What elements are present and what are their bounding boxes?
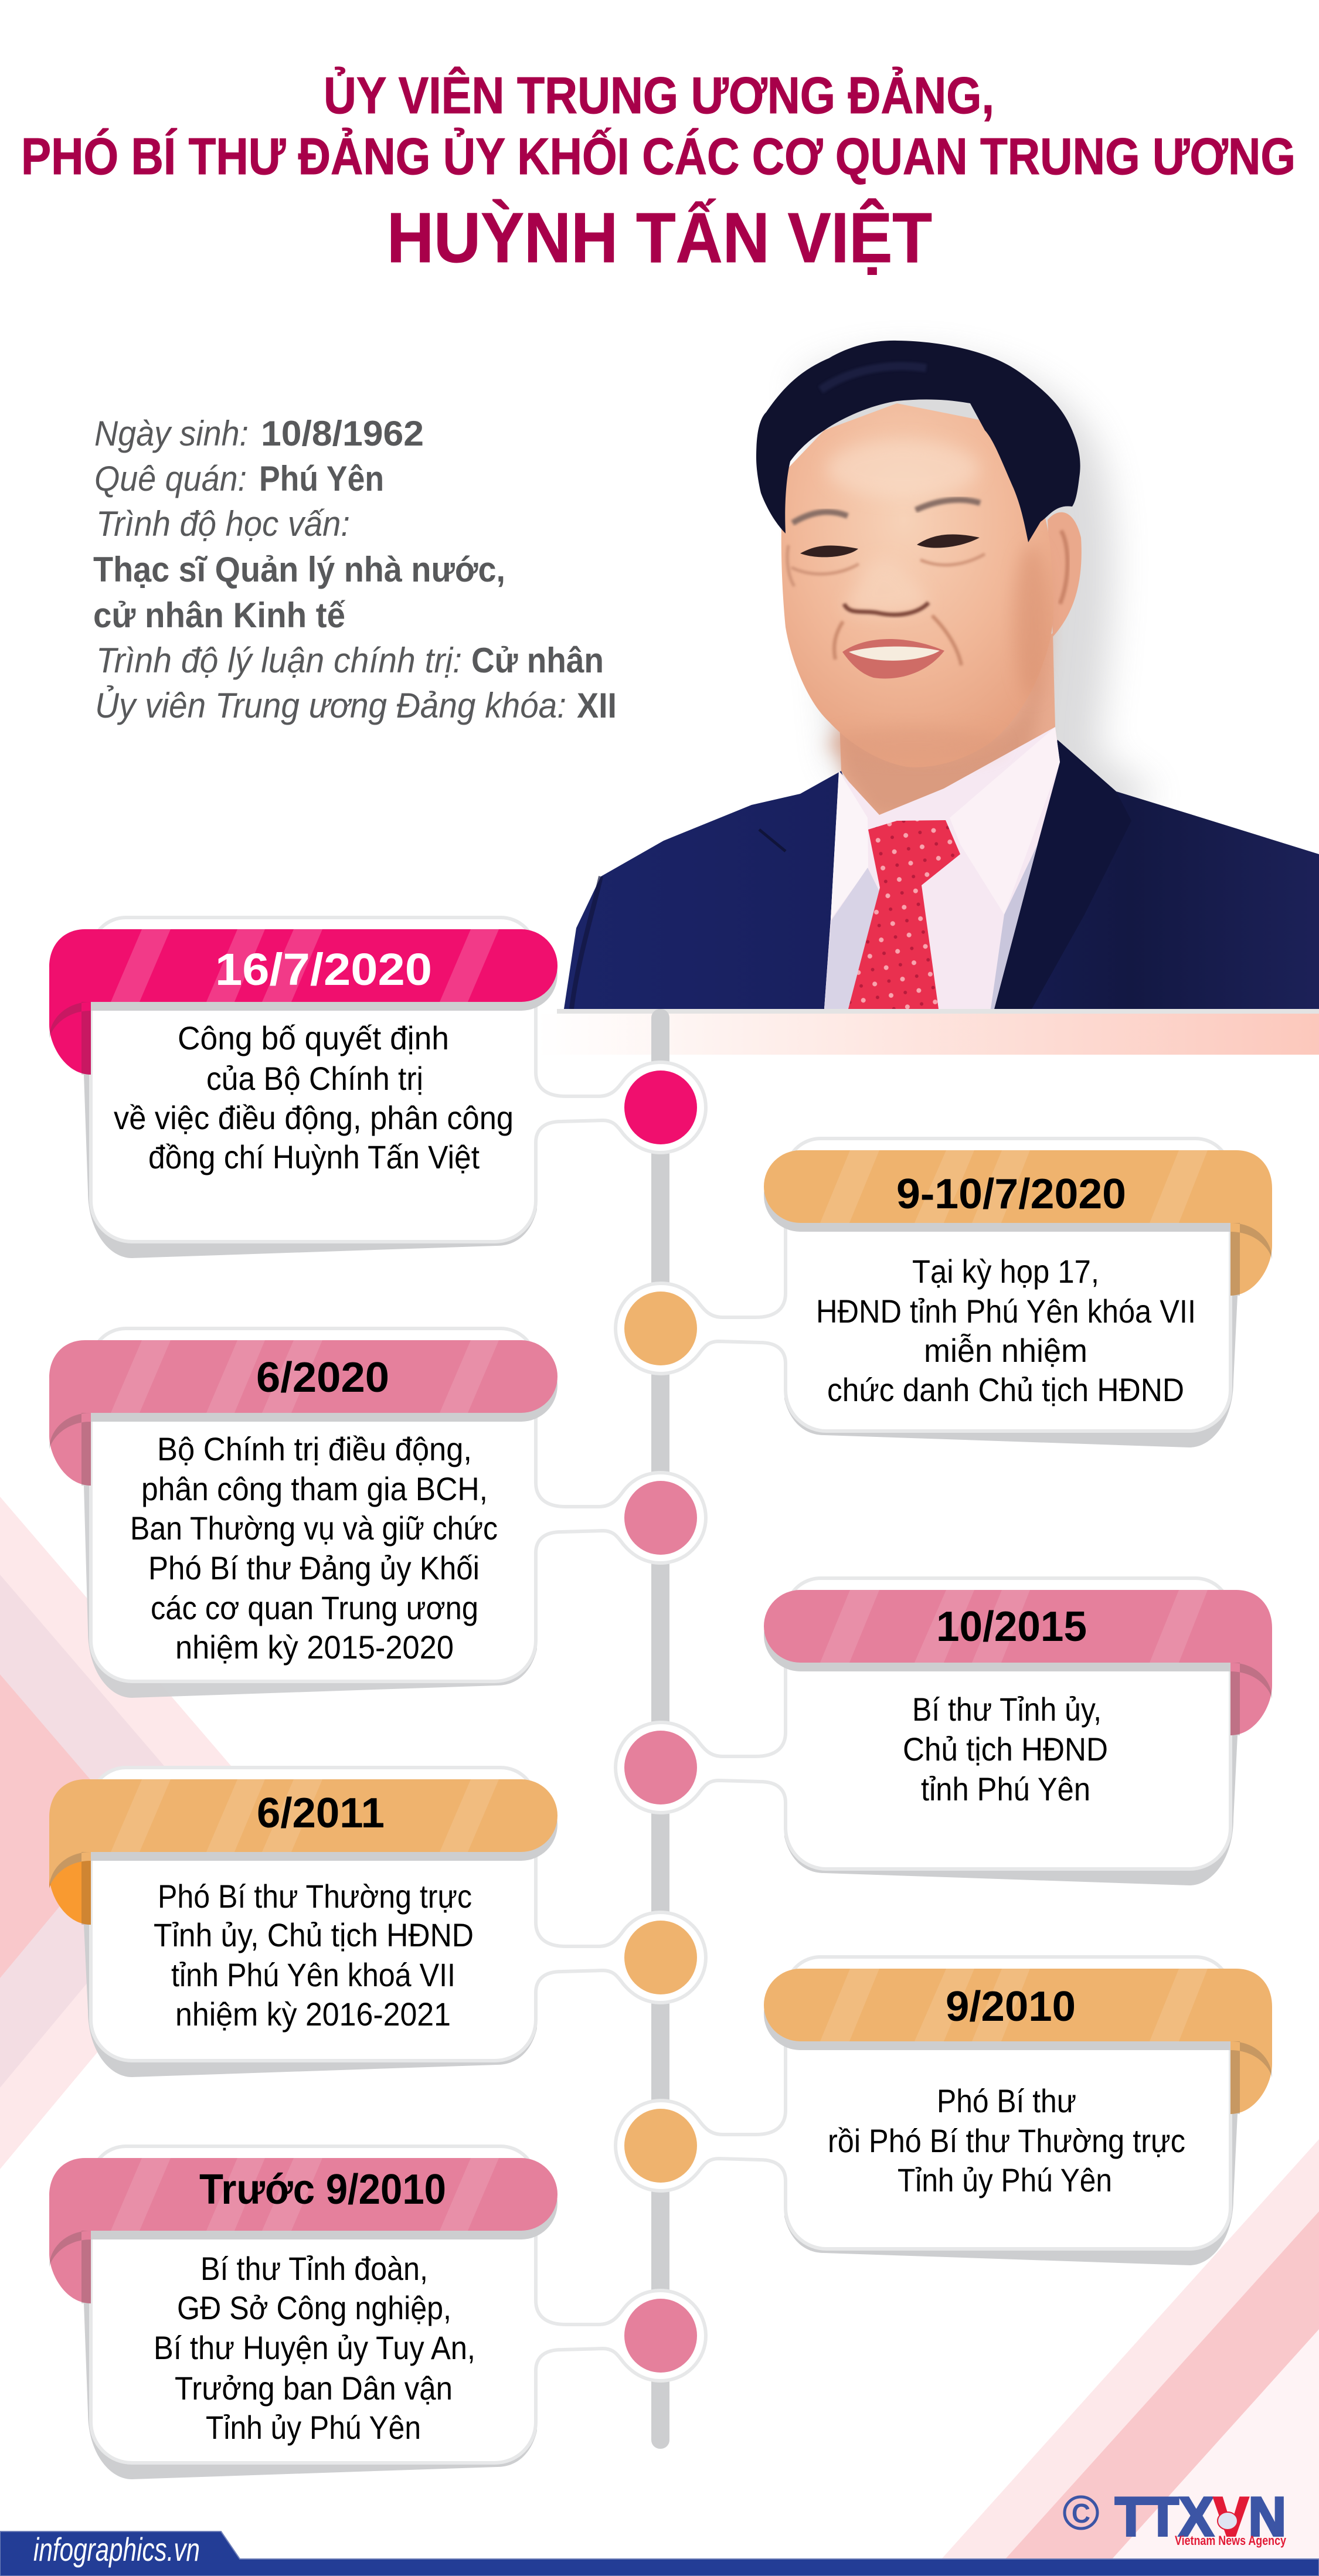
gradient band under portrait — [538, 1009, 1319, 1055]
card body with neck and node ring — [616, 1578, 1230, 1869]
timeline node — [624, 2109, 697, 2183]
personal info text block: 10/8/1962 — [261, 414, 424, 453]
ribbon — [49, 1340, 557, 1486]
card shadow — [84, 1925, 537, 2077]
card: 9-10/7/2020 — [616, 1139, 1272, 1447]
card body with neck and node ring — [616, 1139, 1230, 1431]
card: Trước 9/2010 — [49, 2146, 706, 2479]
ribbon date: 6/2011 — [257, 1790, 385, 1837]
card text: Công bố quyết định — [178, 1019, 449, 1056]
card body with neck and node ring — [91, 917, 706, 1242]
ribbon date: 6/2020 — [256, 1354, 389, 1401]
card body with neck and node ring — [91, 2146, 706, 2463]
card: 16/7/2020 — [49, 917, 706, 1258]
card text: miễn nhiệm — [924, 1332, 1087, 1369]
ribbon date: 9/2010 — [946, 1983, 1076, 2030]
card shadow — [784, 1735, 1238, 1885]
card text — [828, 2082, 1185, 2198]
card text — [903, 1691, 1108, 1807]
title — [21, 66, 1296, 277]
card text: tỉnh Phú Yên khoá VII — [171, 1956, 455, 1993]
background: bottom right pink stripes — [941, 2139, 1319, 2559]
card shadow — [84, 1075, 537, 1258]
ribbon date: Trước 9/2010 — [199, 2166, 446, 2213]
background: left pink chevrons — [0, 1497, 284, 2169]
card text: Phó Bí thư Thường trực — [158, 1878, 472, 1915]
footer site name: infographics.vn — [33, 2531, 200, 2568]
card text: phân công tham gia BCH, — [141, 1470, 488, 1507]
card text — [130, 1430, 498, 1666]
personal info text block: Trình độ học vấn: — [96, 504, 350, 543]
personal info text block: Trình độ lý luận chính trị: — [96, 641, 462, 680]
card: 6/2020 — [49, 1328, 706, 1698]
card text: GĐ Sở Công nghiệp, — [177, 2289, 451, 2326]
personal info text block: Phú Yên — [259, 459, 384, 498]
card text: HĐND tỉnh Phú Yên khóa VII — [816, 1293, 1196, 1330]
logo: TTXVN: TTXVN — [1115, 2486, 1286, 2547]
card text: Bộ Chính trị điều động, — [157, 1430, 472, 1467]
card text: Bí thư Tỉnh đoàn, — [200, 2250, 428, 2287]
personal info text block: Thạc sĩ Quản lý nhà nước, — [93, 550, 505, 589]
personal info text block: XII — [577, 686, 617, 725]
card: 9/2010 — [616, 1957, 1272, 2265]
ribbon — [764, 1969, 1272, 2114]
card text: của Bộ Chính trị — [206, 1060, 423, 1097]
card text: Tỉnh ủy Phú Yên — [206, 2409, 421, 2446]
logo: TTXVN: C — [1072, 2498, 1090, 2529]
card text: Phó Bí thư Đảng ủy Khối — [148, 1549, 480, 1586]
footer bar — [0, 2531, 1319, 2576]
personal info text block: Ủy viên Trung ương Đảng khóa: — [95, 685, 566, 725]
card text: Chủ tịch HĐND — [903, 1731, 1108, 1768]
card text: các cơ quan Trung ương — [151, 1589, 478, 1626]
ribbon date: 9-10/7/2020 — [896, 1171, 1126, 1218]
ribbon — [49, 1779, 557, 1925]
card text — [154, 2250, 475, 2446]
card text: Tỉnh ủy, Chủ tịch HĐND — [154, 1916, 474, 1953]
card body with neck and node ring — [616, 1957, 1230, 2249]
ribbon — [764, 1590, 1272, 1735]
timeline node — [624, 2299, 697, 2373]
ribbon — [49, 2158, 557, 2303]
personal info text block — [93, 414, 617, 725]
card text: Ban Thường vụ và giữ chức — [130, 1510, 498, 1547]
personal info text block: Cử nhân — [471, 641, 604, 680]
logo: TTXVN: Vietnam News Agency — [1175, 2533, 1287, 2548]
card text: về việc điều động, phân công — [114, 1099, 514, 1136]
card shadow — [784, 2114, 1238, 2265]
card text — [114, 1019, 514, 1175]
ribbon — [764, 1150, 1272, 1296]
card text: Phó Bí thư — [937, 2082, 1076, 2119]
card body with neck and node ring — [91, 1768, 706, 2061]
timeline node — [624, 1292, 697, 1365]
card text: Trưởng ban Dân vận — [175, 2370, 453, 2407]
card text: rồi Phó Bí thư Thường trực — [828, 2122, 1185, 2159]
timeline node — [624, 1070, 697, 1144]
personal info text block: Ngày sinh: — [94, 414, 249, 453]
ribbon date: 16/7/2020 — [215, 944, 432, 995]
ribbon — [49, 929, 557, 1075]
card text: tỉnh Phú Yên — [921, 1770, 1090, 1807]
card text: Tỉnh ủy Phú Yên — [898, 2162, 1112, 2198]
card text: nhiệm kỳ 2015-2020 — [175, 1629, 454, 1666]
card: 10/2015 — [616, 1578, 1272, 1885]
card text: nhiệm kỳ 2016-2021 — [175, 1996, 451, 2033]
card text: Bí thư Tỉnh ủy, — [912, 1691, 1102, 1728]
personal info text block: cử nhân Kinh tế — [93, 596, 346, 635]
ribbon date: 10/2015 — [936, 1603, 1087, 1650]
card: 6/2011 — [49, 1768, 706, 2077]
card shadow — [784, 1296, 1238, 1447]
card body with neck and node ring — [91, 1328, 706, 1681]
card text: đồng chí Huỳnh Tấn Việt — [148, 1139, 480, 1175]
personal info text block: Quê quán: — [94, 459, 247, 498]
card text: Tại kỳ họp 17, — [912, 1253, 1099, 1290]
card text — [154, 1878, 474, 2033]
timeline node — [624, 1921, 697, 1994]
portrait — [564, 341, 1319, 1009]
card text: Bí thư Huyện ủy Tuy An, — [154, 2329, 475, 2366]
card text — [816, 1253, 1196, 1408]
timeline node — [624, 1731, 697, 1804]
title: HUỲNH TẤN VIỆT — [387, 198, 932, 277]
title: ỦY VIÊN TRUNG ƯƠNG ĐẢNG, — [324, 66, 994, 124]
card shadow — [84, 2303, 537, 2479]
card text: chức danh Chủ tịch HĐND — [827, 1371, 1184, 1408]
timeline bar — [651, 1009, 669, 2449]
card shadow — [84, 1486, 537, 1698]
timeline node — [624, 1481, 697, 1555]
